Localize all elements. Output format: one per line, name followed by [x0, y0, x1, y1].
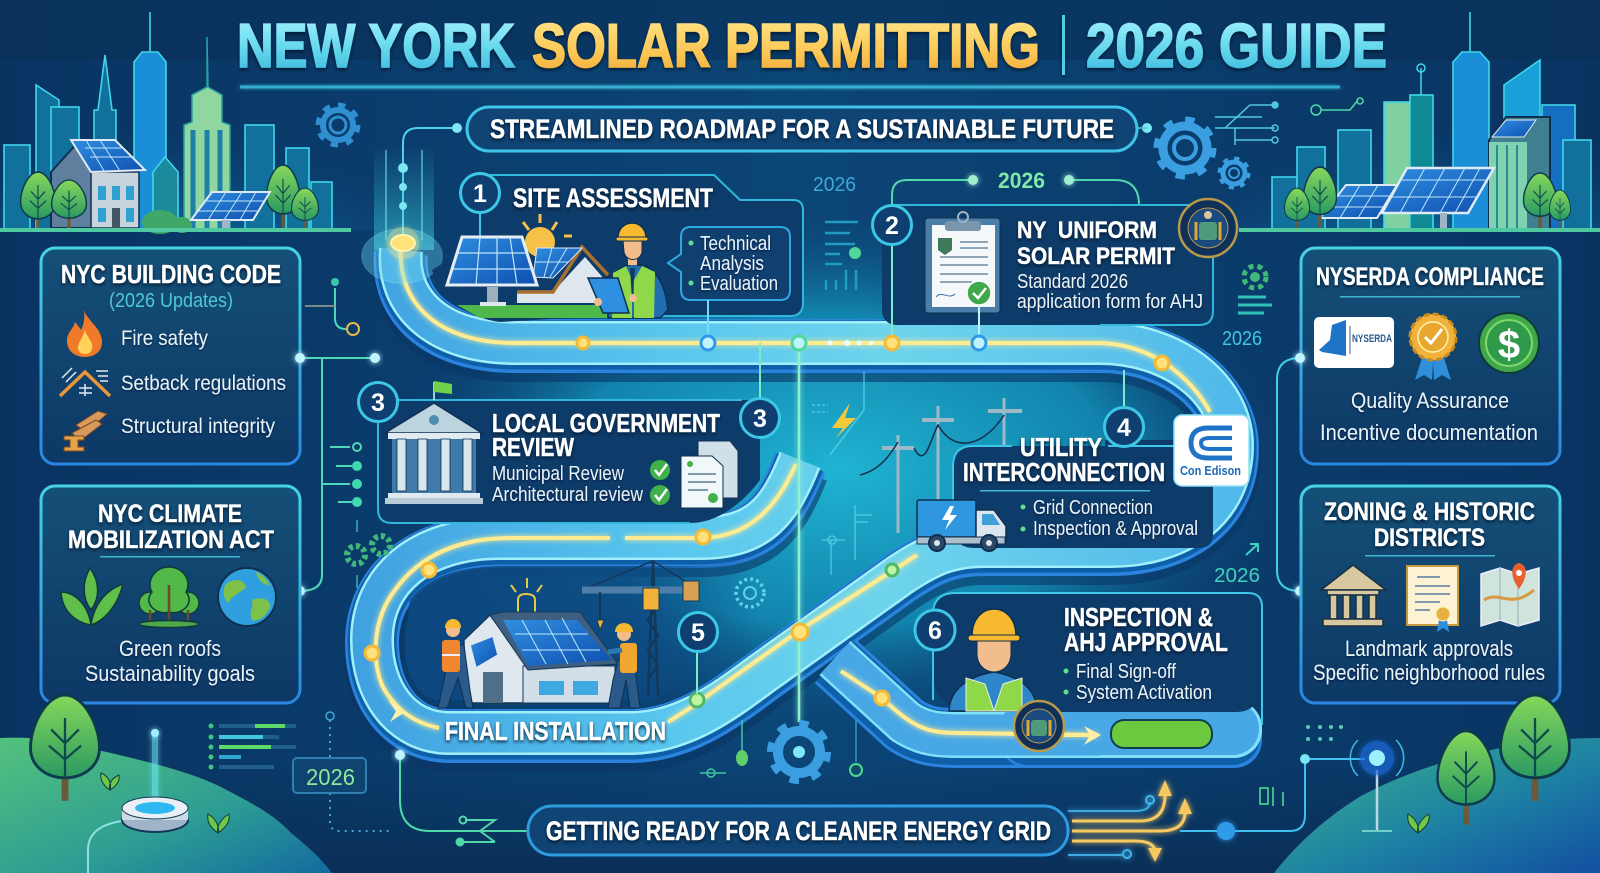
step badge 4: 4	[1117, 414, 1131, 442]
worker	[588, 223, 668, 318]
step badge 1: 1	[473, 180, 487, 208]
illustration: final installation: FINAL INSTALLATION	[445, 716, 666, 746]
year box: 2026	[306, 764, 355, 790]
right hill	[1274, 738, 1600, 873]
panel: NYC climate mobilization act: Green roofs	[119, 636, 221, 661]
lamp with power line	[1180, 740, 1404, 840]
icon: inspector	[949, 609, 1037, 711]
panel: NYC building code: Fire safety	[121, 327, 208, 350]
panel: zoning and historic districts: Landmark approvals	[1345, 636, 1513, 661]
step badge 3 right	[740, 343, 780, 438]
connector circuits left	[295, 278, 380, 596]
icon: left tree	[30, 695, 100, 801]
panel: local government review: Architectural review	[492, 484, 643, 506]
panel: NYC climate mobilization act: Sustainability goals	[85, 661, 255, 686]
roadmap banner	[467, 107, 1137, 151]
callout: site assessment points: Evaluation	[700, 273, 778, 295]
icon: incentive dollar: $	[1498, 323, 1520, 367]
step badge 2: 2	[885, 212, 899, 240]
panel: local government review: LOCAL GOVERNMENT	[492, 408, 720, 438]
finish pill	[1111, 720, 1212, 748]
icon: beacon	[88, 729, 188, 873]
icon: faint gear in loop	[736, 579, 764, 607]
icon: ground solar panel	[191, 192, 270, 229]
title	[237, 12, 1387, 81]
road start light beam	[374, 145, 434, 250]
step badge 4	[1104, 370, 1144, 446]
logo: NYSERDA	[1314, 317, 1394, 368]
icon: center gear	[772, 725, 826, 779]
road: serpentine roadmap path	[372, 244, 1262, 768]
panel: NYC building code: NYC BUILDING CODE	[61, 259, 281, 289]
road: final approach segment	[835, 658, 1262, 768]
callout: site assessment points: Technical	[700, 233, 771, 255]
icon: leaves	[61, 568, 123, 625]
small green markers by gear	[700, 720, 862, 777]
road waypoints: top stretch	[577, 336, 1169, 370]
lightning icon	[832, 403, 856, 438]
utility poles	[860, 398, 1022, 533]
vertical connector through crossing	[798, 345, 800, 722]
title: NEW YORK	[237, 12, 515, 81]
panel: NYC climate mobilization act: NYC CLIMATE	[98, 500, 242, 528]
year tag with arrow right of step 4	[1214, 544, 1260, 587]
icon: house with panels	[464, 612, 618, 703]
panel: zoning and historic districts: ZONING & HISTORIC	[1324, 498, 1535, 526]
panel: utility interconnection: UTILITY	[1020, 432, 1102, 462]
callout: site assessment points	[668, 227, 790, 300]
road: yellow progress line	[376, 244, 1210, 735]
panel: NY uniform solar permit: NY UNIFORM	[1017, 217, 1157, 244]
panel: NY uniform solar permit	[872, 199, 1237, 343]
icon: globe	[218, 568, 276, 626]
icon: left trees	[21, 165, 318, 234]
icon: incentive dollar	[1479, 313, 1539, 373]
icon: trees	[139, 567, 199, 628]
panel: local government review	[358, 343, 780, 523]
icon: right gears	[1158, 121, 1248, 187]
mini data lines near step 1	[825, 222, 861, 290]
panel: inspection and AHJ approval: Final Sign-off	[1076, 661, 1176, 683]
illustration: site assessment scene	[447, 214, 668, 318]
panel: NY uniform solar permit: SOLAR PERMIT	[1017, 243, 1175, 270]
bottom banner: GETTING READY FOR A CLEANER ENERGY GRID	[546, 816, 1051, 846]
road waypoints: return stretch	[365, 530, 898, 707]
icon: right hill trees	[1438, 695, 1570, 825]
step badge 3 left	[358, 382, 398, 422]
icon: map with pin	[1481, 563, 1539, 626]
panel: local government review: REVIEW	[492, 432, 574, 462]
icon: right installer	[608, 623, 640, 708]
icon: sprouts	[101, 773, 1429, 833]
logo: NYSERDA: NYSERDA	[1352, 333, 1392, 345]
left skyline	[0, 12, 351, 234]
icon: structural beam	[64, 411, 107, 451]
logo: Con Edison: Con Edison	[1180, 463, 1241, 478]
icon: NY seal on road	[1014, 701, 1064, 751]
road arrowhead	[388, 700, 405, 722]
panel: NY uniform solar permit: application form for AHJ	[1017, 291, 1203, 313]
panel: local government review: Municipal Review	[492, 463, 624, 485]
year tag right of step 2: 2026	[1222, 328, 1262, 350]
mini bar list	[208, 724, 296, 770]
connector and year tag above step 2	[892, 168, 1139, 205]
title glow rule	[240, 86, 1340, 88]
illustration: final installation	[388, 561, 718, 746]
right circuit details	[1137, 98, 1363, 145]
panel: NYSERDA compliance: Quality Assurance	[1351, 388, 1509, 413]
panel: NYSERDA compliance: Incentive documentation	[1320, 420, 1538, 445]
step badge 5	[678, 612, 718, 694]
energy flow arrows	[1068, 780, 1192, 862]
panel: NYC building code: (2026 Updates)	[109, 290, 233, 312]
panel: inspection and AHJ approval: INSPECTION &	[1064, 602, 1213, 632]
step badge 3 right: 3	[753, 405, 767, 433]
panel: zoning and historic districts: Specific neighborhood rules	[1313, 660, 1545, 685]
connector: banner to road start	[398, 123, 462, 240]
icon: documents	[681, 441, 738, 508]
icon: certificate	[1407, 566, 1458, 632]
panel: site assessment: SITE ASSESSMENT	[513, 183, 713, 213]
panel: NYSERDA compliance	[1301, 248, 1560, 464]
icon: right trees	[1284, 167, 1570, 229]
icon: government building	[385, 381, 483, 504]
road start glow	[362, 227, 442, 283]
faint circuit lines center	[812, 372, 872, 575]
connector and year tag above step 2: 2026	[998, 168, 1045, 193]
step badge 6: 6	[928, 617, 942, 645]
panel: NYC building code: Structural integrity	[121, 415, 275, 438]
panel: inspection and AHJ approval: System Activation	[1076, 682, 1212, 704]
icon: utility truck	[917, 500, 1006, 551]
icon: beam of light	[511, 578, 542, 612]
year box	[293, 712, 392, 831]
icon: left installer	[438, 619, 498, 708]
mini bars icon	[1260, 787, 1283, 806]
arrow to finish	[1064, 726, 1101, 745]
icon: NY state seal	[1179, 199, 1237, 257]
icon: fire safety	[67, 310, 102, 357]
icon: house with rooftop solar	[51, 140, 145, 228]
left hill	[0, 738, 332, 873]
panel: zoning and historic districts	[1301, 486, 1560, 703]
small icons beside step 2	[1238, 266, 1272, 313]
step badge 1	[460, 174, 500, 212]
panel: NYC building code: Setback regulations	[121, 372, 286, 395]
year tag above step 1: 2026	[813, 174, 856, 196]
panel: NYC climate mobilization act	[41, 486, 300, 703]
panel: utility interconnection: INTERCONNECTION	[963, 457, 1165, 487]
connector circuit right	[1277, 353, 1305, 596]
step badge 3 left: 3	[371, 389, 385, 417]
icon: setback regulations	[60, 368, 110, 396]
logo: Con Edison	[1174, 415, 1249, 486]
panel: NYC climate mobilization act: MOBILIZATION ACT	[68, 526, 274, 554]
panel: inspection and AHJ approval: AHJ APPROVAL	[1064, 627, 1228, 657]
circuit line bottom of road left	[395, 750, 528, 846]
panel: utility interconnection: Inspection & Approval	[1033, 518, 1198, 540]
icon: left gear	[319, 106, 357, 144]
roadmap banner: STREAMLINED ROADMAP FOR A SUSTAINABLE FUTURE	[490, 114, 1114, 144]
step badge 6	[915, 610, 955, 650]
panel: site assessment	[432, 174, 803, 343]
decorative dots near lamp	[1306, 725, 1343, 741]
panel: NYC building code	[41, 248, 300, 464]
icon: landmark	[1321, 565, 1386, 626]
right skyline	[1239, 12, 1600, 232]
step badge 2	[872, 206, 912, 244]
panel: inspection and AHJ approval	[915, 593, 1262, 725]
panel: utility interconnection	[917, 370, 1249, 551]
icon: green checks	[650, 460, 670, 505]
icon: tower with rooftop panel	[1489, 117, 1550, 229]
callout: site assessment points: Analysis	[700, 253, 764, 275]
step badge 5: 5	[691, 619, 705, 647]
panel: NY uniform solar permit: Standard 2026	[1017, 271, 1128, 293]
title: 2026 GUIDE	[1086, 12, 1387, 81]
panel: zoning and historic districts: DISTRICTS	[1374, 524, 1485, 552]
bottom banner	[528, 806, 1068, 855]
panel: utility interconnection: Grid Connection	[1033, 497, 1153, 519]
interior of installation loop	[405, 545, 760, 700]
title: SOLAR PERMITTING	[532, 12, 1040, 81]
year tag with arrow right of step 4: 2026	[1214, 565, 1260, 587]
icon: permit clipboard	[925, 212, 1000, 313]
icon: green gears	[347, 520, 390, 588]
icon: quality rosette	[1410, 314, 1456, 380]
icon: approval check	[967, 281, 991, 343]
icon: crane	[582, 561, 699, 696]
icon: right solar panels	[1320, 168, 1494, 229]
